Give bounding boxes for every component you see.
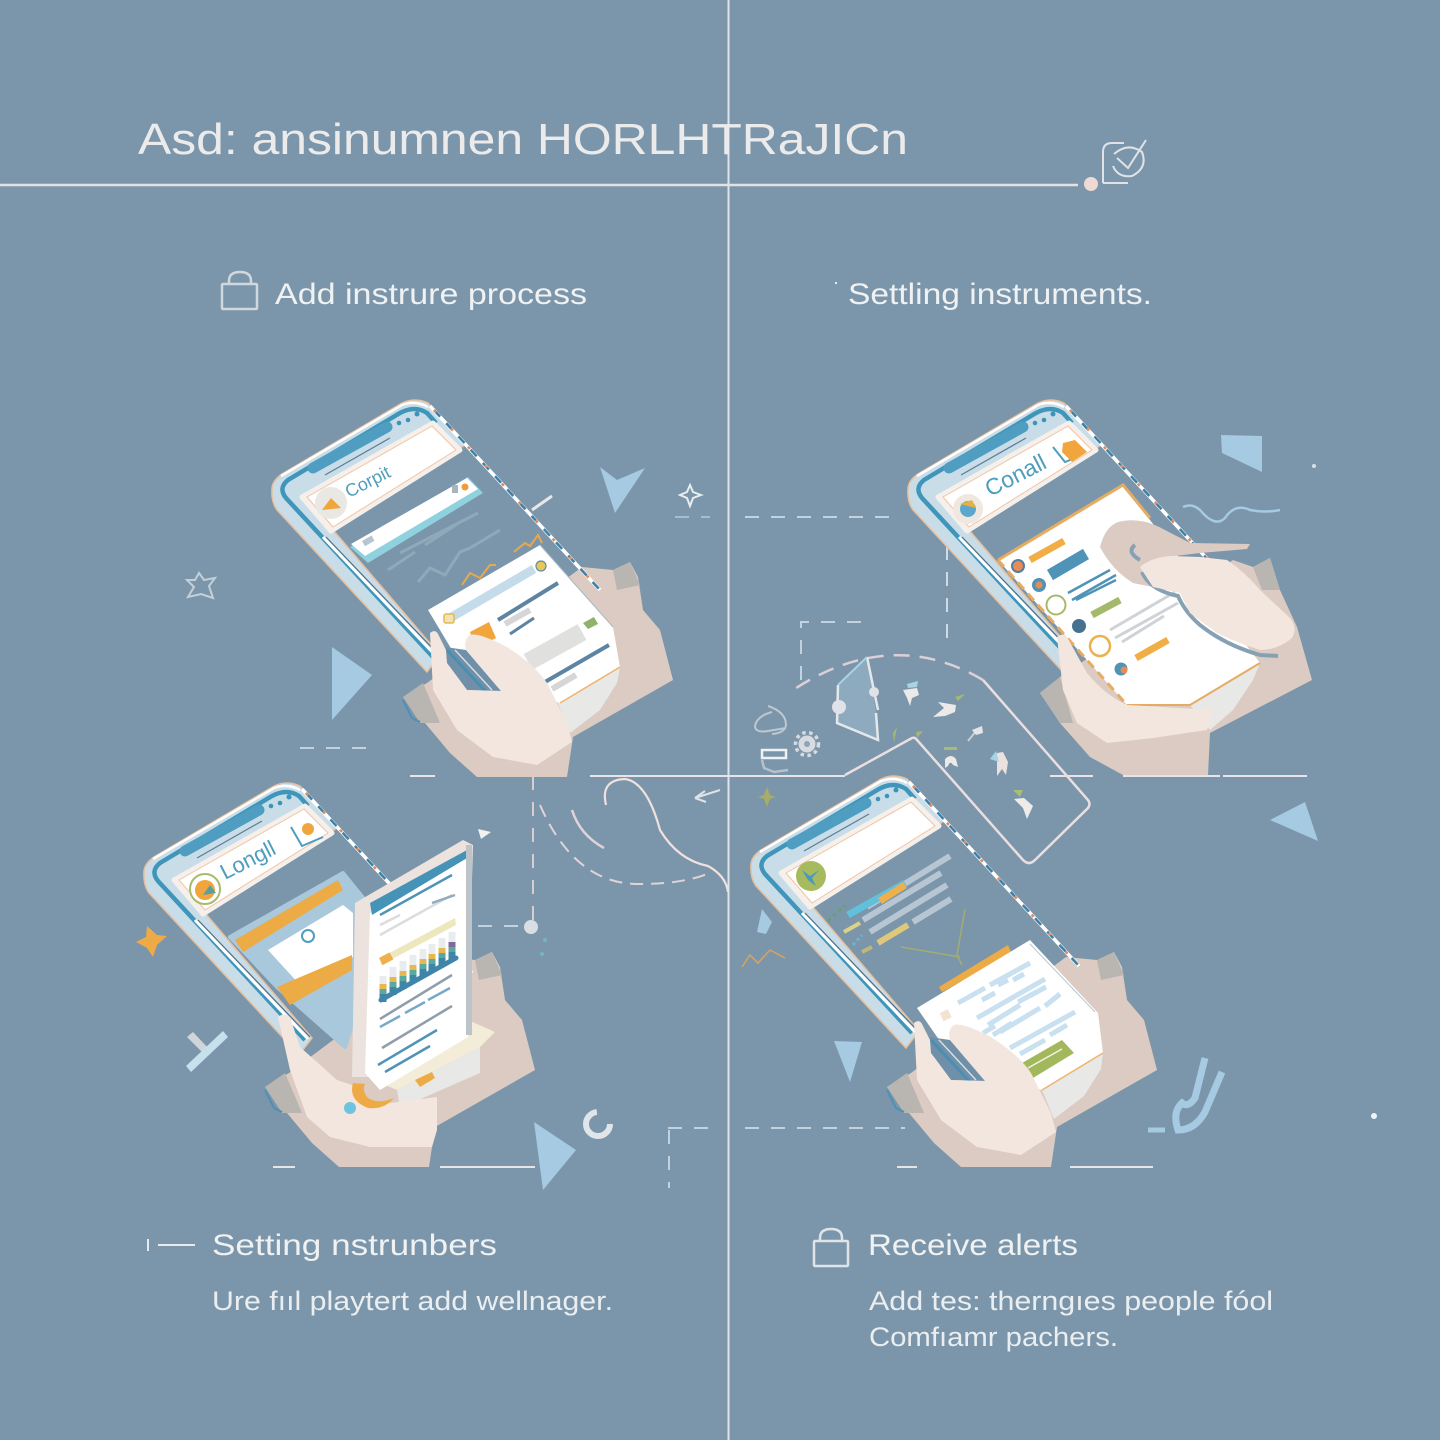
hand back shading — [1040, 558, 1280, 723]
decor: sparkle — [680, 485, 701, 506]
icon: figure 3 — [1013, 790, 1033, 819]
decor: hook icon — [1148, 1058, 1222, 1130]
decor: blue leaf — [757, 909, 772, 934]
paper — [428, 545, 620, 733]
hand upper light — [1140, 556, 1295, 650]
panel: phone 1 add instrument — [272, 400, 673, 777]
small arc — [572, 810, 604, 848]
hand front — [430, 631, 572, 765]
glass panel icon — [832, 657, 879, 740]
paper sheet — [352, 840, 473, 1090]
decor: white dot — [1312, 464, 1316, 468]
phone frame — [908, 400, 1236, 672]
hand back — [887, 952, 1157, 1167]
icon: lock — [222, 272, 257, 309]
icon: small gold star — [758, 787, 776, 807]
heading text: Receive alerts — [868, 1229, 1078, 1262]
decor: triangle right — [1270, 802, 1318, 841]
decor: arrowhead shape — [600, 467, 645, 513]
decor: triangle left — [332, 647, 372, 720]
dashed arc — [540, 805, 712, 884]
small icon cluster: tools — [755, 681, 1033, 819]
panel: phone 2 settling instruments — [908, 400, 1312, 775]
decor: ring — [586, 1112, 610, 1136]
heading text: Setting nstrunbers — [212, 1229, 497, 1262]
decor: triangle bottom — [534, 1122, 576, 1190]
decor: star outline — [187, 573, 215, 598]
body text line 2: Comfıamr pachers. — [869, 1322, 1118, 1352]
heading text: Settling instruments. — [848, 278, 1152, 311]
icon: dash marker — [148, 1239, 195, 1251]
body text line 1: Add tes: therngıes people fóol — [869, 1286, 1273, 1316]
icon: pointer 2 — [933, 702, 956, 717]
phone card label: Conall — [980, 449, 1050, 501]
decor: triangle lower — [834, 1041, 862, 1082]
center vertical divider — [728, 0, 730, 1440]
heading: receive alerts block — [814, 1229, 1273, 1352]
card icon — [796, 861, 826, 891]
phone frame — [144, 783, 472, 1055]
decor: white dot right — [1371, 1113, 1377, 1119]
icon: figure 2 — [990, 751, 1008, 776]
paper — [998, 485, 1260, 730]
blue dot — [344, 1102, 356, 1114]
decor: small white arrow — [478, 829, 491, 839]
phone frame — [751, 776, 1079, 1048]
arrow — [695, 790, 720, 802]
decor: orange squiggle — [742, 950, 785, 967]
dashed guide lines — [300, 517, 947, 1188]
phone card label — [953, 440, 1087, 524]
looping curve — [605, 779, 728, 892]
heading: add instrure process — [222, 272, 587, 311]
icon: lock — [814, 1229, 848, 1266]
hand front — [278, 1014, 437, 1147]
thumb dark — [1100, 520, 1250, 587]
orange tab — [939, 945, 1012, 992]
icon: pin — [968, 726, 983, 741]
phone card label — [315, 462, 394, 519]
title: Asd: ansinumnen HORLHTRaJICn — [138, 115, 908, 164]
heading: setting numbers block — [148, 1229, 613, 1316]
bar chart — [379, 918, 456, 1002]
hand lower light — [1057, 634, 1213, 743]
orange squiggles — [462, 535, 542, 585]
phone-outline connector with dashed arc — [790, 655, 1090, 863]
paper — [917, 940, 1103, 1119]
hand back — [403, 562, 673, 777]
pencil mark — [532, 496, 552, 510]
icon: pointer 1 — [903, 681, 919, 706]
icon: robot — [762, 750, 788, 772]
orange ring under paper — [352, 1083, 394, 1108]
faint list lines — [388, 513, 500, 582]
decor: folder shape — [1221, 435, 1262, 472]
hand back — [265, 952, 535, 1167]
phone card label: Longll — [216, 836, 280, 884]
icon: gear — [796, 732, 818, 756]
tick mark — [835, 282, 837, 284]
list rows — [828, 856, 951, 952]
panel: phone 4 receive alerts — [751, 776, 1157, 1167]
title underline with dot — [0, 177, 1098, 191]
sheet text rows — [378, 875, 455, 1072]
icon: figure 1 — [944, 747, 958, 768]
olive arrows — [901, 909, 965, 965]
icon: swirl — [755, 706, 786, 734]
decor: teal dots — [540, 938, 547, 956]
panel: phone 3 setting numbers — [144, 783, 535, 1167]
phone card label — [190, 823, 323, 904]
phone card label: Corpit — [342, 462, 394, 502]
paper base — [385, 1020, 495, 1108]
icon: title corner badge — [1103, 140, 1146, 183]
inner cards on screen — [230, 873, 385, 1047]
hand back — [1040, 558, 1312, 775]
decor: squiggle — [1183, 506, 1280, 522]
decor: orange star — [136, 926, 167, 957]
connector node — [524, 920, 538, 934]
search bar — [350, 477, 483, 563]
hand front — [914, 1021, 1056, 1155]
phone frame — [272, 400, 600, 672]
decor: T bar — [186, 1031, 228, 1072]
icon: green sprouts — [893, 694, 965, 742]
center flow curves — [524, 779, 728, 934]
hand upper shadow — [1131, 545, 1278, 656]
body text: Ure fııl playtert add wellnager. — [212, 1286, 613, 1316]
heading text: Add instrure process — [275, 278, 587, 311]
connector lines between panels — [273, 776, 1307, 1167]
